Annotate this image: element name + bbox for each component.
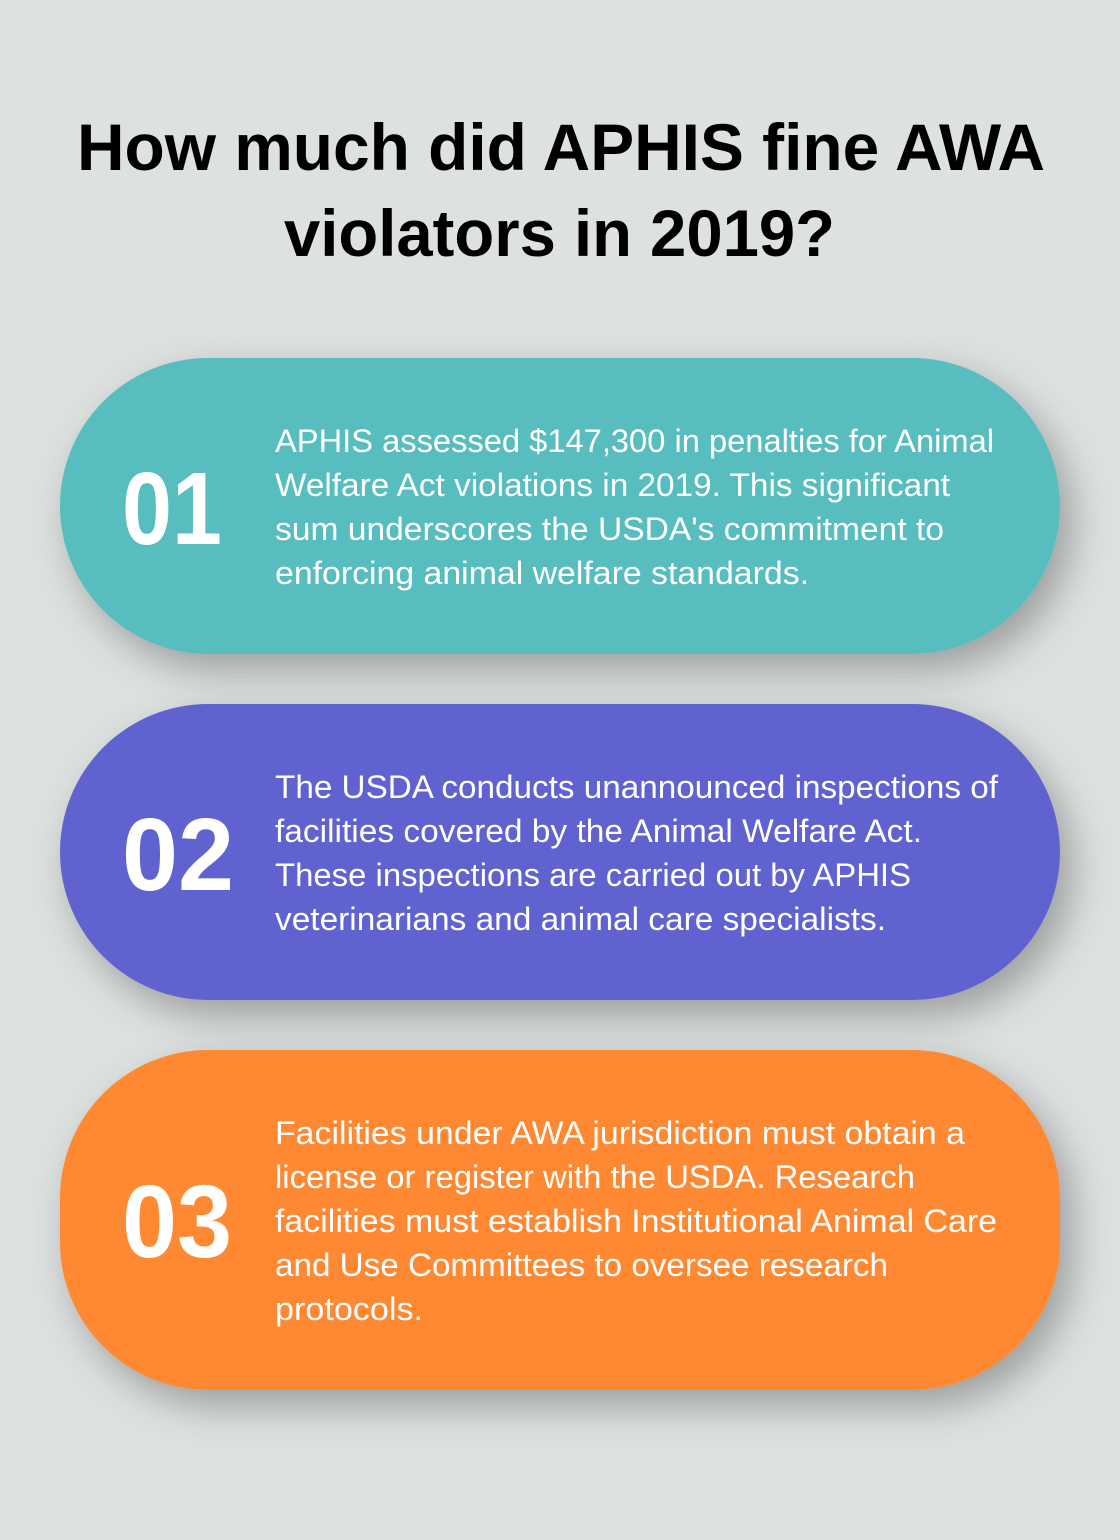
text block: penalties: enforcing animal welfare standards. [275,555,809,591]
text block: licensing: Facilities under AWA jurisdiction must obtain a [275,1115,965,1151]
text block: penalties: Welfare Act violations in 2019. This significant [275,467,950,503]
text block: penalties: APHIS assessed $147,300 in penalties for Animal [275,423,994,459]
text block: inspections: veterinarians and animal care specialists. [275,901,886,937]
title: How much did APHIS fine AWA [77,110,1045,184]
text block: licensing: license or register with the USDA. Research [275,1159,915,1195]
title: violators in 2019? [284,196,835,270]
purple pill background [60,704,1060,1000]
title [77,110,1045,270]
orange pill background [60,1050,1060,1390]
text block: licensing: and Use Committees to oversee research [275,1247,888,1283]
text block: inspections [275,769,998,937]
number 03: 03 [122,1164,232,1279]
number 02: 02 [122,797,234,912]
panel: step 03 [60,1050,1060,1390]
number 01: 01 [122,451,222,566]
teal pill background [60,358,1060,654]
panel: step 02 [60,704,1060,1000]
text block: inspections: These inspections are carried out by APHIS [275,857,911,893]
text block: licensing [275,1115,997,1327]
text block: licensing: protocols. [275,1291,423,1327]
text block: licensing: facilities must establish Institutional Animal Care [275,1203,997,1239]
text block: penalties [275,423,994,591]
text block: inspections: The USDA conducts unannounced inspections of [275,769,998,805]
text block: inspections: facilities covered by the Animal Welfare Act. [275,813,922,849]
text block: penalties: sum underscores the USDA's commitment to [275,511,944,547]
panel: step 01 [60,358,1060,654]
